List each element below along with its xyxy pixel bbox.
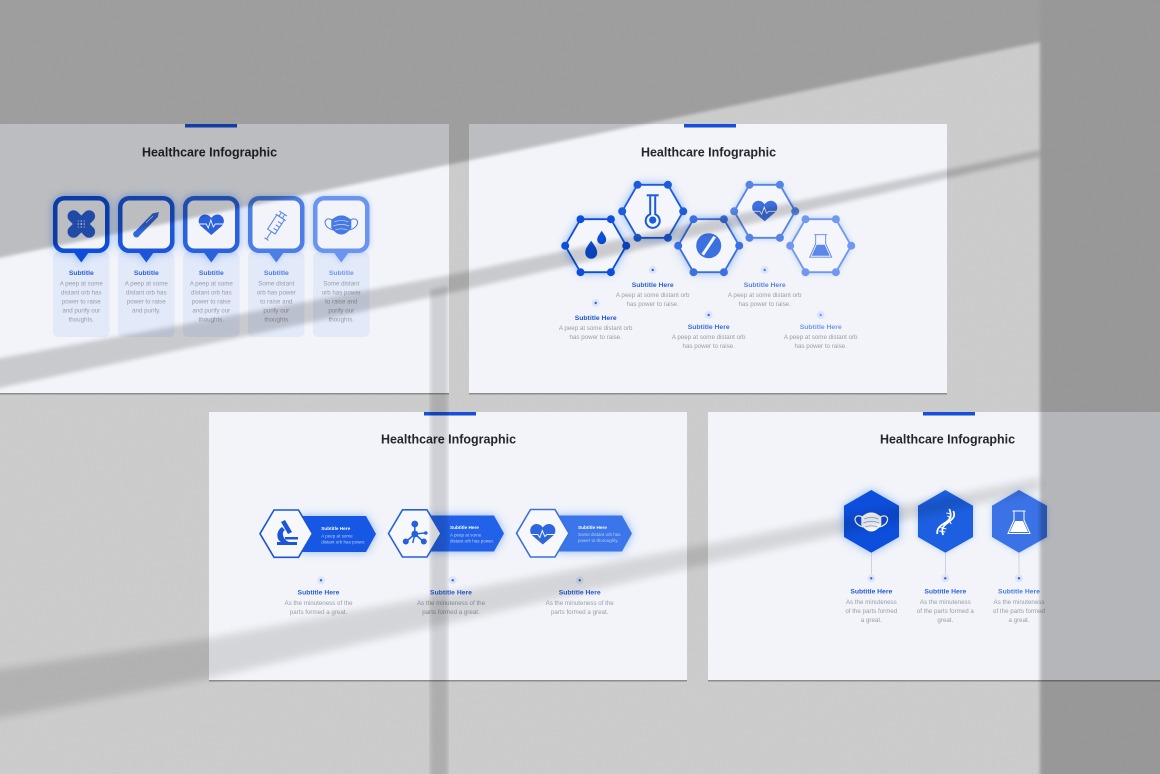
label 5 xyxy=(784,311,858,350)
label 5: Subtitle Here xyxy=(800,324,842,331)
card 5: mask: orb has power xyxy=(322,289,361,296)
card 2: thermometer: power to raise xyxy=(127,298,166,305)
label 1: has power to raise. xyxy=(570,334,622,341)
card 4: syringe: Some distant xyxy=(258,280,295,287)
label 2: Subtitle Here xyxy=(430,589,472,596)
icon: conical flask xyxy=(1008,511,1030,534)
arrow 1: microscope xyxy=(260,510,376,557)
arrow 2: molecule: distant orb has power. xyxy=(450,538,494,543)
column 1: mask: Subtitle Here xyxy=(850,589,892,596)
icon: syringe xyxy=(261,210,288,242)
label 1: A peep at some distant orb xyxy=(559,325,633,332)
column 3: flask: Subtitle Here xyxy=(998,589,1040,596)
icon: conical flask xyxy=(810,235,832,257)
label 5: has power to raise. xyxy=(795,343,847,350)
card 5: mask xyxy=(313,198,370,337)
label 3 xyxy=(546,576,614,616)
arrow 2: molecule: Subtitle Here xyxy=(450,525,479,530)
icon: thermometer xyxy=(133,212,159,237)
card 3: heart xyxy=(183,198,240,337)
label 2: A peep at some distant orb xyxy=(616,292,690,299)
column 2: DNA: great. xyxy=(937,617,953,624)
card 3: heart: Subtitle xyxy=(199,270,224,277)
card 4: syringe: thoughts xyxy=(264,316,288,323)
card 5: mask: to raise and xyxy=(325,298,358,305)
column 2: DNA: As the minuteness xyxy=(920,599,971,606)
card 2: thermometer xyxy=(118,198,174,337)
panel: slide 4, solid hexagons xyxy=(708,412,1160,682)
label 2 xyxy=(616,266,690,308)
arrow 3: heart xyxy=(516,510,632,557)
arrow 2: molecule: A peep at some xyxy=(450,532,482,537)
card 1: bandage: A peep at some xyxy=(60,280,103,287)
card 3: heart: A peep at some xyxy=(190,280,233,287)
icon: test tube xyxy=(646,195,660,228)
card 4: syringe: orb has power xyxy=(257,289,296,296)
heading: slide 3 title: Healthcare Infographic xyxy=(381,432,516,446)
panel: slide 1, callout cards xyxy=(0,124,449,394)
card 1: bandage: Subtitle xyxy=(69,270,94,277)
icon: DNA helix xyxy=(937,509,954,535)
label 4: A peep at some distant orb xyxy=(728,292,802,299)
icon: microscope xyxy=(277,520,298,545)
hexagon 1: drops xyxy=(561,215,630,276)
card 3: heart: distant orb has xyxy=(191,289,232,296)
label 1: Subtitle Here xyxy=(298,589,340,596)
label 1: As the minuteness of the xyxy=(284,600,353,607)
label 2: parts formed a great. xyxy=(422,609,480,616)
heading: slide 4 title: Healthcare Infographic xyxy=(880,432,1015,446)
icon: heart pulse xyxy=(530,524,556,544)
column 3: flask: As the minuteness xyxy=(994,599,1044,606)
label 1 xyxy=(284,576,353,616)
heading: slide 1 title: Healthcare Infographic xyxy=(142,144,277,160)
label 3: parts formed a great. xyxy=(551,609,609,616)
icon: bandage xyxy=(65,208,98,240)
label 3: As the minuteness of the xyxy=(546,600,614,607)
column 1: mask: As the minuteness xyxy=(846,599,897,606)
arrow 3: heart: power to thoroughly. xyxy=(578,538,618,543)
card 4: syringe: purify our xyxy=(263,307,289,314)
slide group xyxy=(0,124,1160,682)
card 1: bandage: thoughts. xyxy=(69,316,94,323)
arrow 3: heart: Subtitle Here xyxy=(578,525,607,530)
label 2: has power to raise. xyxy=(627,301,679,308)
hexagon 5: conical flask xyxy=(786,215,855,276)
hexagon 4: heart xyxy=(730,181,799,242)
card 2: thermometer: Subtitle xyxy=(134,270,159,277)
card 4: syringe: Subtitle xyxy=(264,270,289,277)
column 1: mask: of the parts formed xyxy=(845,608,898,615)
column 2: DNA xyxy=(917,490,974,624)
column 1: mask xyxy=(844,490,899,624)
heading: slide 2 title: Healthcare Infographic xyxy=(641,144,776,160)
label 4 xyxy=(728,266,802,308)
arrow 1: microscope: A peep at some xyxy=(321,533,353,538)
card 3: heart: thoughts. xyxy=(199,316,224,323)
card 1: bandage: power to raise xyxy=(62,298,101,305)
card 4: syringe xyxy=(248,198,304,337)
icon: pill xyxy=(696,233,721,258)
arrow 1: microscope: distant orb has power. xyxy=(321,539,365,544)
card 2: thermometer: A peep at some xyxy=(125,280,168,287)
arrow 1: microscope: Subtitle Here xyxy=(321,526,351,531)
panel: slide 2, hexagon chain xyxy=(469,124,947,394)
column 2: DNA: of the parts formed a xyxy=(917,608,974,615)
card 3: heart: power to raise xyxy=(192,298,231,305)
card 3: heart: and purify our xyxy=(192,307,230,314)
icon: molecule xyxy=(403,521,428,544)
card 1: bandage: distant orb has xyxy=(61,289,102,296)
label 5: A peep at some distant orb xyxy=(784,334,858,341)
icon: face mask xyxy=(325,216,358,234)
icon: water drops xyxy=(585,231,606,259)
label 1: parts formed a great. xyxy=(290,609,347,616)
label 2: As the minuteness of the xyxy=(417,600,486,607)
column 3: flask: a great. xyxy=(1009,617,1030,624)
label 3: has power to raise. xyxy=(683,343,735,350)
label 3: Subtitle Here xyxy=(559,589,601,596)
hexagon 3: pill xyxy=(674,215,743,276)
label 4: Subtitle Here xyxy=(744,282,786,289)
label 3: A peep at some distant orb xyxy=(672,334,746,341)
card 5: mask: thoughts. xyxy=(329,316,354,323)
label 3: Subtitle Here xyxy=(688,324,730,331)
column 2: DNA: Subtitle Here xyxy=(924,589,966,596)
column 3: flask: of the parts formed xyxy=(993,608,1046,615)
card 2: thermometer: and purify. xyxy=(132,307,161,314)
card 1: bandage: and purify our xyxy=(62,307,100,314)
label 4: has power to raise. xyxy=(739,301,791,308)
card 4: syringe: to raise and xyxy=(260,298,293,305)
label 2: Subtitle Here xyxy=(632,282,674,289)
icon: heart pulse xyxy=(752,201,778,221)
card 5: mask: purify our xyxy=(328,307,354,314)
icon: face mask xyxy=(855,512,888,532)
column 3: flask xyxy=(992,490,1047,624)
panel: slide 3, hexagon arrows xyxy=(209,412,687,682)
card 5: mask: Subtitle xyxy=(329,270,354,277)
label 2 xyxy=(417,576,486,616)
label 1: Subtitle Here xyxy=(575,315,617,322)
card 5: mask: Some distant xyxy=(323,280,360,287)
card 1: bandage xyxy=(53,198,110,337)
icon: heart pulse xyxy=(198,214,224,235)
hexagon 2: round flask xyxy=(618,181,687,242)
arrow 2: molecule xyxy=(388,510,504,557)
column 1: mask: a great. xyxy=(861,617,882,624)
card 2: thermometer: distant orb has xyxy=(126,289,167,296)
label 1 xyxy=(559,299,633,341)
label 3 xyxy=(672,311,746,350)
arrow 3: heart: Some distant orb has xyxy=(578,532,621,537)
